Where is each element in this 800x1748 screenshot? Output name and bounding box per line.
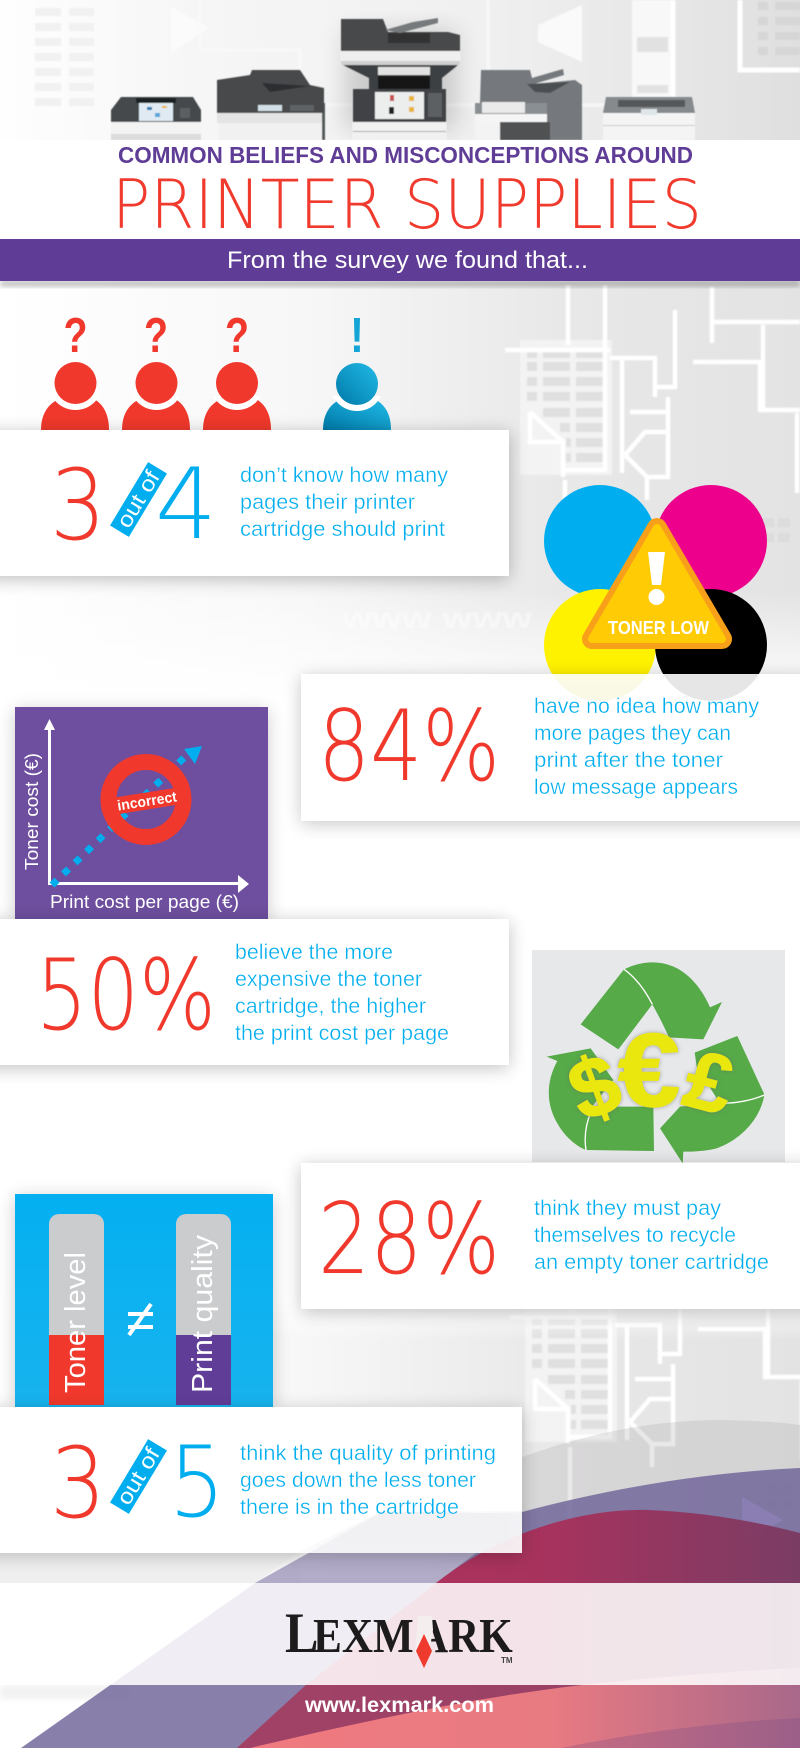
description <box>235 941 449 1045</box>
stat: 28%: 28% <box>318 1183 500 1297</box>
icon: recycling with currencies <box>532 950 785 1163</box>
not equal sign <box>128 1304 153 1335</box>
description: cartridge should print <box>240 518 445 541</box>
stat: 3 out of 4: 4 <box>155 448 217 562</box>
description: believe the more <box>235 941 393 964</box>
description: don’t know how many <box>240 464 449 487</box>
description: low message appears <box>534 776 738 799</box>
title: printer supplies: PRINTER SUPPLIES <box>112 166 702 245</box>
currency symbols: £ <box>675 1033 743 1133</box>
printer 5 <box>603 97 695 140</box>
description: think the quality of printing <box>240 1442 496 1465</box>
description <box>534 1197 769 1274</box>
description: think they must pay <box>534 1197 722 1220</box>
decorative curves at bottom <box>21 1420 800 1748</box>
person 1: ? <box>64 309 88 363</box>
heading: common beliefs: COMMON BELIEFS AND MISCONCEPTIONS AROUND <box>118 142 693 168</box>
description: an empty toner cartridge <box>534 1251 769 1274</box>
logo: Lexmark: ARK <box>417 1608 513 1663</box>
person 3: ? <box>225 309 249 363</box>
x axis label: Print cost per page (€) <box>50 891 239 912</box>
description <box>534 695 760 799</box>
axes <box>44 719 249 893</box>
stat: 3 out of 4 <box>50 448 217 563</box>
logo: Lexmark: EXM <box>313 1608 414 1663</box>
logo: Lexmark <box>285 1601 513 1668</box>
icon: CMYK toner low <box>544 485 767 701</box>
header band <box>0 140 800 245</box>
person 1 <box>41 309 109 430</box>
printer 3 <box>341 18 460 140</box>
dashed arrow <box>52 746 202 885</box>
y axis label: Toner cost (€) <box>22 753 42 870</box>
stat: 3 out of 5 <box>50 1426 225 1541</box>
toner level bar <box>49 1214 104 1405</box>
footer band <box>0 1583 800 1685</box>
person 2: ? <box>144 309 168 363</box>
chart: toner level vs print quality <box>15 1194 273 1410</box>
row of printers <box>111 18 695 140</box>
description: print after the toner <box>534 749 723 772</box>
stat: 3 out of 5: out of <box>111 1442 165 1509</box>
currency symbols <box>556 1013 743 1139</box>
description <box>240 464 449 541</box>
stat: 50%: 50% <box>36 939 216 1053</box>
description: there is in the cartridge <box>240 1496 459 1519</box>
panel: 84% <box>292 668 800 833</box>
person 2 <box>122 309 190 430</box>
description: expensive the toner <box>235 968 422 991</box>
icon: people with question marks <box>41 309 391 430</box>
description: have no idea how many <box>534 695 760 718</box>
stat: 3 out of 5: 3 <box>50 1427 106 1541</box>
printer 1 <box>111 97 201 140</box>
currency symbols: $ <box>556 1035 633 1139</box>
person 4 <box>323 309 391 430</box>
panel: 3 out of 4 <box>0 430 509 579</box>
description: goes down the less toner <box>240 1469 476 1492</box>
description: cartridge, the higher <box>235 995 426 1018</box>
description: themselves to recycle <box>534 1224 736 1247</box>
logo: Lexmark: TM <box>501 1656 513 1665</box>
person 3 <box>203 309 271 430</box>
stat: 3 out of 5: 5 <box>169 1426 225 1540</box>
print quality bar: Print quality <box>187 1234 219 1393</box>
chart: toner cost vs print cost <box>15 707 268 922</box>
recycling arrows <box>547 962 764 1163</box>
stat: 3 out of 4: 3 <box>50 449 106 563</box>
incorrect ring <box>108 762 184 837</box>
print quality bar <box>176 1214 231 1405</box>
description <box>240 1442 496 1519</box>
logo: Lexmark: L <box>285 1601 318 1665</box>
panel: 50% <box>0 919 509 1068</box>
person 4: ! <box>350 309 364 363</box>
faint www lettering: www www <box>341 602 533 635</box>
website url: www.lexmark.com <box>304 1694 494 1717</box>
incorrect ring: incorrect <box>116 789 178 815</box>
panel: 3 out of 5 <box>0 1407 522 1556</box>
stat: 3 out of 4: out of <box>111 465 165 532</box>
description: the print cost per page <box>235 1022 449 1045</box>
purple subtitle bar <box>0 239 800 286</box>
purple subtitle bar: From the survey we found that... <box>227 247 588 274</box>
warning triangle: TONER LOW <box>608 618 709 638</box>
printer 2 <box>217 70 325 140</box>
currency symbols: € <box>618 1013 680 1129</box>
panel: 28% <box>301 1163 800 1312</box>
description: pages their printer <box>240 491 415 514</box>
printer 4 <box>475 69 582 140</box>
warning triangle <box>592 528 722 639</box>
description: more pages they can <box>534 722 731 745</box>
stat: 84%: 84% <box>318 690 500 804</box>
toner level bar: Toner level <box>60 1252 92 1393</box>
